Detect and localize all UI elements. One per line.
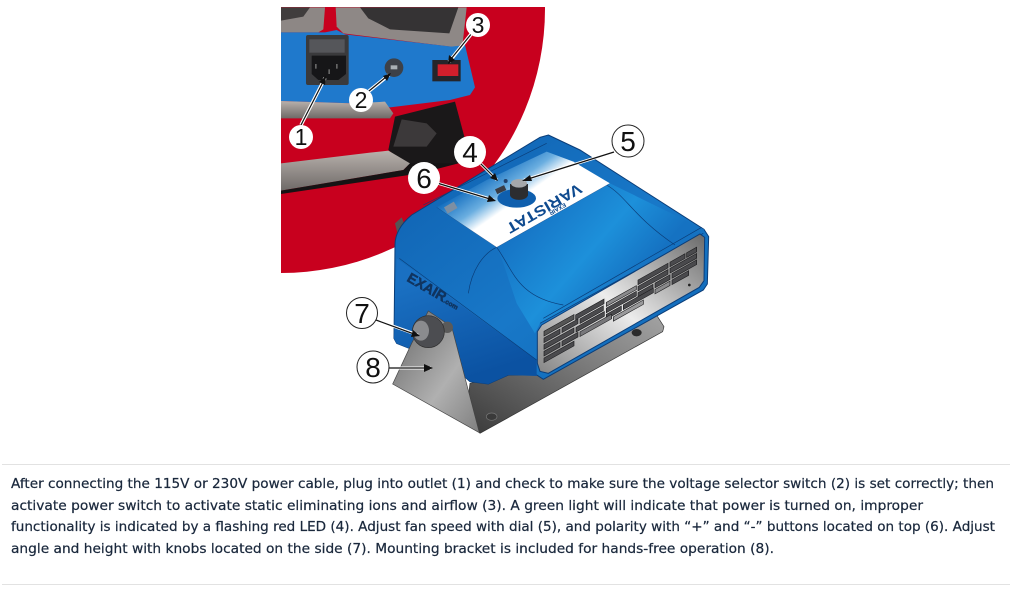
callout 7 with arrow to side knob [346,298,420,337]
instruction text block: After connecting the 115V or 230V power cable, plug into outlet (1) and check to make sure the voltage selector switch (2) is set correctly; then [11,477,994,492]
red power switch [432,60,461,81]
callout 8 with arrow to bracket [357,351,433,383]
callout 6 with arrow to polarity buttons: 6 [416,163,432,194]
left grey filter pad [281,7,325,32]
far knob [395,217,407,237]
adjustment knob [412,316,453,348]
power outlet [306,35,349,85]
callout 1 with arrow to power outlet [289,76,326,150]
callout 4 with arrow to LED [454,136,498,181]
inset photo: rear panel of the unit [281,7,475,194]
callout 5 with arrow to speed dial: 5 [620,126,636,157]
speed dial [510,179,528,200]
instruction text block: functionality is indicated by a flashing red LED (4). Adjust fan speed with dial (5), and polarity with “+” and “-” buttons located on top (6). Adjust [11,520,995,535]
voltage selector switch [385,58,403,77]
status LED [504,179,508,183]
instruction text block [11,477,995,557]
callout 3 with arrow to power switch: 3 [472,12,484,38]
instruction text block: activate power switch to activate static eliminating ions and airflow (3). A green light will indicate that power is turned on, improper [11,499,924,514]
top panel label [437,152,610,247]
blue rear panel [281,30,475,107]
main grey filter pad with mesh [336,7,467,47]
EXAIR small logo on label: EXAIR [547,201,567,216]
callout 7 with arrow to side knob: 7 [354,298,370,329]
QR code patch [444,202,457,214]
grille slots [544,246,697,363]
callout 4 with arrow to LED: 4 [462,137,478,168]
bolt on plate [632,329,642,336]
lower grey housing edge [281,101,393,118]
blue body [394,135,709,384]
callout 8 with arrow to bracket: 8 [365,352,381,383]
VARISTAT logo: VARISTAT [503,180,584,236]
instruction text block: angle and height with knobs located on the side (7). Mounting bracket is included for hands-free operation (8). [11,542,774,557]
lower grey bar [281,151,410,191]
callout 2 with arrow to voltage selector [349,73,391,113]
callout 5 with arrow to speed dial [522,125,644,181]
front steel grille [537,234,705,373]
callout 6 with arrow to polarity buttons [408,162,496,202]
EXAIR side logo: EXAIR.com [404,269,463,312]
callout 3 with arrow to power switch [448,12,490,64]
bolt on bracket [486,413,497,420]
side mounting bracket [393,311,479,433]
callout 1 with arrow to power outlet: 1 [295,124,307,150]
polarity buttons [495,185,506,194]
Varistat device illustration [393,135,709,433]
callout 2 with arrow to voltage selector: 2 [355,87,367,113]
black bracket wedge [388,102,468,168]
dial base [497,189,536,208]
mounting plate under the unit [467,310,664,433]
red circular inset background [281,7,545,274]
